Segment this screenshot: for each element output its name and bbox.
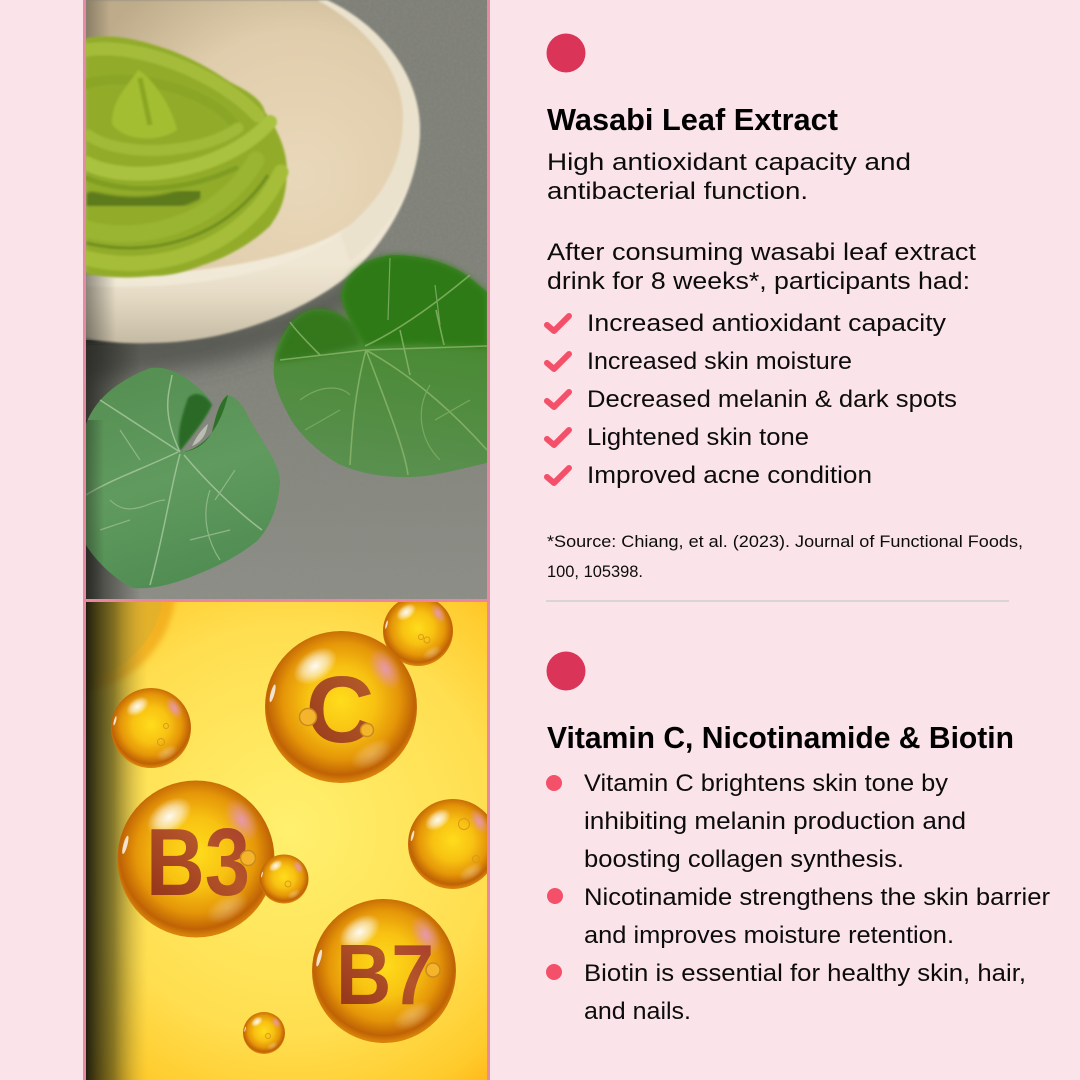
icon: vitamin B7 bubble [312,899,456,1043]
heading: vitamins: Vitamin C, Nicotinamide & Biotin [547,720,1014,755]
icon: section dot [546,34,586,72]
checklist: study results: Improved acne condition [587,462,872,489]
icon: bottom bubble [243,1012,285,1054]
bullet: vitamin C: boosting collagen synthesis. [584,846,904,873]
text block: source note: *Source: Chiang, et al. (2023). Journal of Functional Foods, [547,532,1023,551]
checklist: study results: Increased skin moisture [587,348,852,375]
icon: section dot [546,652,586,690]
checklist: study results: Decreased melanin & dark spots [587,386,957,413]
panel: wasabi photo [86,0,487,599]
icon: left wasabi leaf [86,368,280,588]
icon: right bubble [408,799,487,889]
bullet: biotin: and nails. [584,998,691,1025]
icon: left bubble [111,688,191,768]
checklist: study results: Increased antioxidant capacity [587,310,947,337]
bullet: biotin: Biotin is essential for healthy skin, hair, [584,960,1026,987]
large blurred bubble at corner [106,602,177,681]
icon: vitamin C bubble: C [306,657,374,763]
text block: summary [547,149,911,205]
text block: source note [547,532,1023,581]
section: wasabi leaf extract [546,34,1023,581]
icon: top right bubble [383,596,453,666]
section: vitamins [546,652,1050,1025]
panel frame: image column border [83,0,490,1080]
icon: vitamin B3 bubble [118,780,274,938]
text block: summary: antibacterial function. [547,178,808,205]
icon: ceramic bowl [86,0,420,344]
icon: vitamin B7 bubble: B7 [336,928,434,1023]
icon: wasabi paste swirl [86,37,287,277]
bowl shadow [86,276,349,384]
heading: wasabi leaf extract: Wasabi Leaf Extract [547,102,838,137]
icon: vitamin C bubble [265,631,417,783]
icon: vitamin B3 bubble: B3 [146,809,250,916]
bullet: nicotinamide [547,884,1050,949]
text block: summary: High antioxidant capacity and [547,149,911,176]
text block: study intro: After consuming wasabi leaf extract [547,239,976,266]
checklist: study results: Lightened skin tone [587,424,809,451]
icon: small bubble [260,854,308,904]
bullet: nicotinamide: and improves moisture retention. [584,922,954,949]
bullet: vitamin C: Vitamin C brightens skin tone by [584,770,949,797]
icon: right wasabi leaf [274,255,487,477]
bullet: nicotinamide: Nicotinamide strengthens the skin barrier [584,884,1050,911]
bullet: biotin [546,960,1026,1025]
text block: source note: 100, 105398. [547,562,643,581]
panel: vitamin bubbles [86,602,487,1080]
bullet: vitamin C: inhibiting melanin production and [584,808,966,835]
checklist: study results [547,310,957,489]
bullet: vitamin C [546,770,966,873]
text block: study intro: drink for 8 weeks*, participants had: [547,268,970,295]
text block: study intro [547,239,976,295]
